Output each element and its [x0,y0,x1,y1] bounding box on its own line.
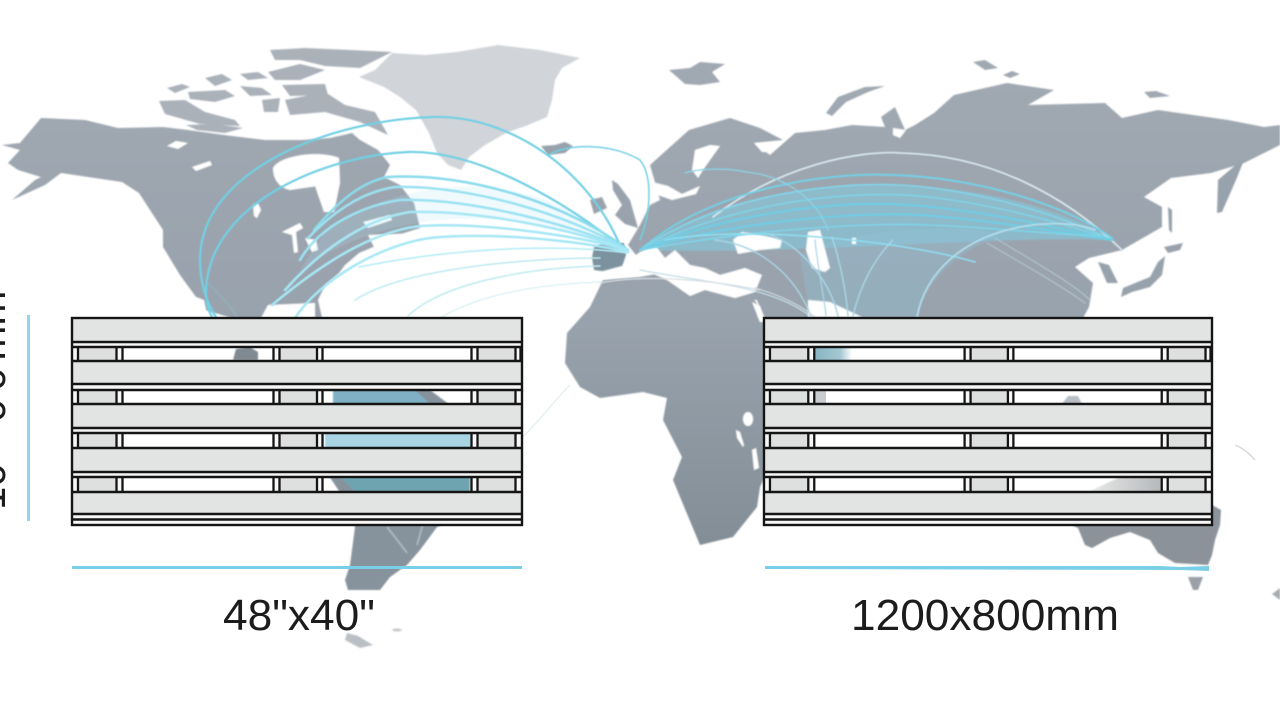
arcs: west to the Americas [200,117,649,318]
map: New Zealand [1272,588,1280,600]
arcs tint: Middle East fan [800,229,1000,318]
map: Africa [565,272,768,545]
map: North American lakes and bays [167,141,420,318]
pallet boards [73,319,521,514]
arcs tint: Eurasia [640,185,1115,251]
pallet blocks [78,347,515,492]
pallet blocks [770,347,1205,492]
dimension line: left pallet depth [27,315,30,521]
arcs: east to Asia [600,153,1122,317]
map: Australia [387,396,1280,600]
dimension line: right pallet width [765,566,1209,571]
map: Arctic Russian islands [669,60,1170,116]
map: Korea [1098,262,1118,283]
map: Australia slot fragment [1090,477,1162,492]
map: Iberia [592,243,626,272]
pallet outlines [764,318,1212,525]
pallet block gaps [73,347,521,492]
pallet block gaps [765,347,1211,492]
map: South America [325,390,471,648]
pallet: 48x40 [72,318,522,525]
map: Mediterranean, Black and Caspian seas [600,128,906,470]
faint trace near Australia [1235,445,1255,460]
map: Eurasia [628,83,1280,318]
pallet: 1200x800 [764,318,1212,525]
map: Greenland [359,45,580,170]
map: Central America slot [233,347,258,360]
pallet boards [765,319,1211,514]
pallet strips [765,342,1211,525]
map: Southeast Asia fragment [1062,396,1082,404]
pallet strips [73,342,521,525]
map: Tasmania [1188,577,1203,590]
flight arcs [200,117,1122,318]
dimension line: left pallet width [72,566,522,569]
map: North America [2,118,420,318]
label: 48x40 inches: 48"x40" [223,591,375,640]
map: white trails on South America [387,507,427,553]
pallet: 1200x800 slot map traces [813,347,852,404]
pallet outlines [72,318,522,525]
faint trace over the Atlantic [520,385,570,440]
map: Japan [1121,160,1244,297]
map: Iceland [541,142,573,155]
map: Canadian Arctic islands [159,48,392,135]
map: British Isles [612,180,638,228]
arcs tint: Atlantic bundle [300,186,625,270]
label: 1200x800 mm: 1200x800mm [851,591,1119,640]
